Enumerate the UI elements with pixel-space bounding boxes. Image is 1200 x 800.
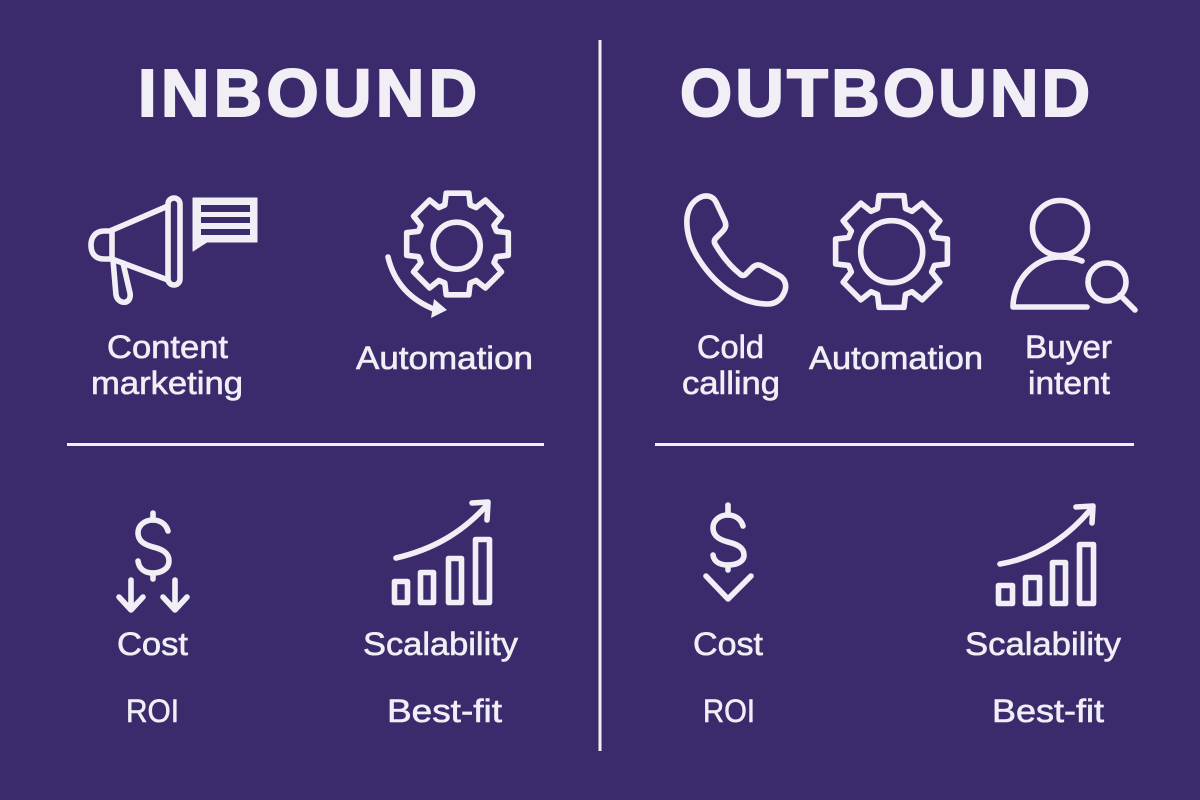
label: automation: Automation	[356, 340, 533, 376]
label: roi: ROI	[703, 693, 755, 729]
icon: person with magnifier	[1013, 200, 1135, 310]
icon: scalability chart	[394, 502, 490, 602]
icon: gear with rotation arrow	[388, 193, 508, 318]
label: cost: Cost	[693, 626, 763, 662]
heading: outbound: OUTBOUND	[680, 56, 1090, 131]
label: cold calling	[682, 329, 780, 401]
label: content marketing	[91, 329, 243, 401]
icon: dollar with chevron down	[706, 505, 751, 599]
label: scalability: Scalability	[965, 626, 1121, 662]
icon: phone	[687, 196, 786, 304]
panel: inbound	[91, 56, 533, 729]
label: cost: Cost	[117, 626, 188, 662]
label: best-fit: Best-fit	[387, 693, 502, 729]
panel: outbound	[680, 56, 1135, 729]
icon: dollar with two down arrows	[119, 513, 187, 610]
label: buyer intent: intent	[1028, 365, 1110, 401]
label: roi: ROI	[126, 693, 179, 729]
icon: scalability chart	[998, 506, 1094, 604]
label: automation: Automation	[809, 340, 983, 376]
label: cold calling: calling	[682, 365, 780, 401]
label: best-fit: Best-fit	[992, 693, 1104, 729]
label: content marketing: Content	[107, 329, 228, 365]
label: scalability: Scalability	[363, 626, 518, 662]
label: content marketing: marketing	[91, 365, 243, 401]
heading: inbound: INBOUND	[138, 56, 477, 131]
label: buyer intent	[1025, 329, 1112, 401]
label: buyer intent: Buyer	[1025, 329, 1112, 365]
icon: gear	[836, 196, 947, 307]
icon: megaphone with speech bubble	[91, 198, 257, 302]
label: cold calling: Cold	[697, 329, 764, 365]
